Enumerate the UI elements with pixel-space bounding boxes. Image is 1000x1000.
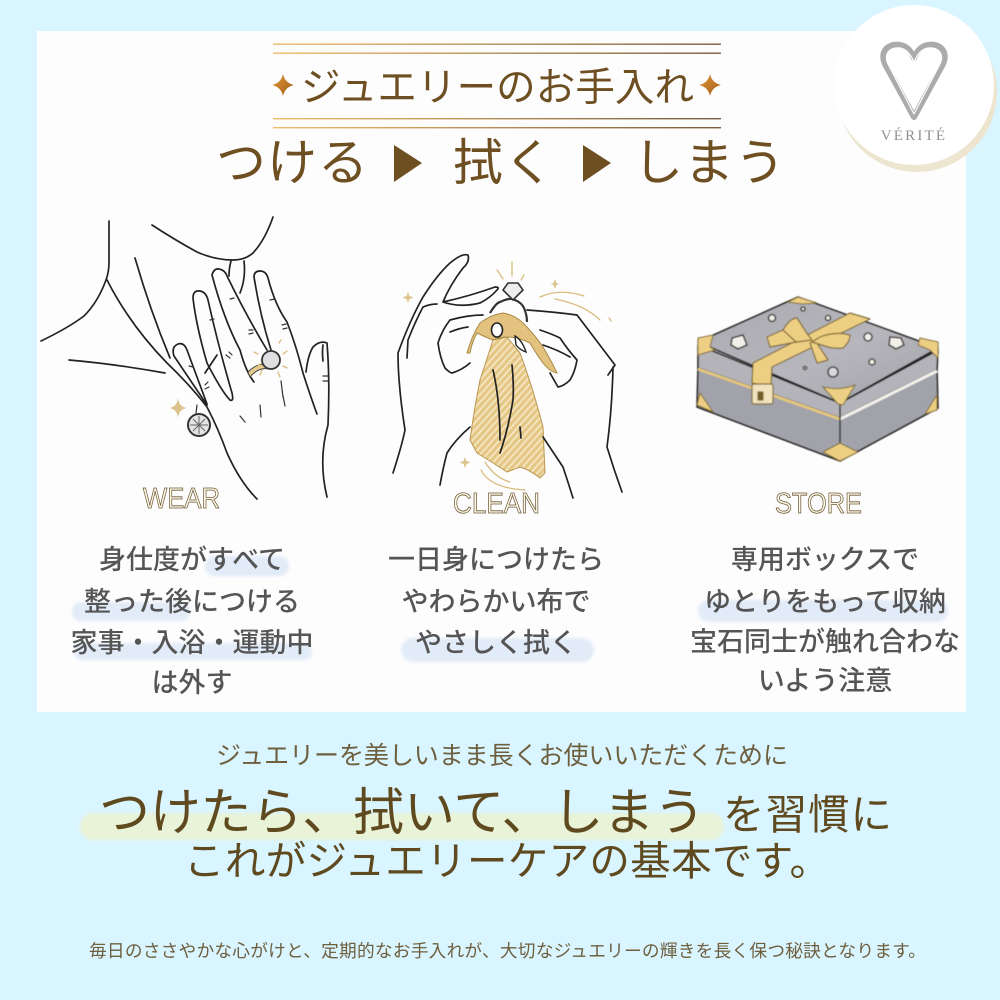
gold corners xyxy=(697,297,938,461)
text block: store: 宝石同士が触れ合わな xyxy=(690,627,960,657)
text block: store xyxy=(690,545,960,696)
label: STORE: STORE xyxy=(775,488,862,520)
closing message: つけたら、拭いて、しまう xyxy=(99,784,705,841)
text block: store: 専用ボックスで xyxy=(731,545,919,575)
text block: clean xyxy=(388,545,604,662)
illustration: hand on neck xyxy=(41,217,329,499)
heading: wear, clean, store xyxy=(216,135,785,191)
gold ribbon xyxy=(752,313,870,404)
cloth xyxy=(467,313,557,478)
text block: clean: やわらかい布で xyxy=(402,587,590,617)
heading: wear, clean, store: しまう xyxy=(633,135,785,191)
text block: store: ゆとりをもって収納 xyxy=(704,587,946,617)
closing message: を習慣に xyxy=(723,791,892,838)
text block: store: いよう注意 xyxy=(758,666,892,696)
text block: wear: 家事・入浴・運動中 xyxy=(70,628,314,658)
label: WEAR: WEAR xyxy=(143,483,220,515)
footnote: 毎日のささやかな心がけと、定期的なお手入れが、大切なジュエリーの輝きを長く保つ秘訣となります。 xyxy=(89,941,926,961)
panel: main white card xyxy=(37,31,966,712)
illustration: jewelry box xyxy=(697,297,938,461)
text block: wear: 整った後につける xyxy=(84,587,300,617)
text block: clean: やさしく拭く xyxy=(415,628,577,658)
logo badge xyxy=(834,5,997,172)
closing message: これがジュエリーケアの基本です。 xyxy=(184,838,830,884)
title block xyxy=(272,44,721,128)
text block: wear: は外す xyxy=(152,668,232,698)
logo badge: VÉRITÉ xyxy=(881,127,947,144)
label: CLEAN: CLEAN xyxy=(453,488,540,520)
heading: wear, clean, store: 拭く xyxy=(453,135,554,191)
text block: wear xyxy=(70,545,314,698)
text block: clean: 一日身につけたら xyxy=(388,545,604,575)
illustration: hands cleaning ring xyxy=(393,255,622,498)
lead text: ジュエリーを美しいまま長くお使いいただくために xyxy=(216,742,788,770)
closing message xyxy=(80,784,892,884)
heading: wear, clean, store: つける xyxy=(216,135,368,191)
gems xyxy=(731,307,904,377)
text block: wear: 身仕度がすべて xyxy=(99,545,285,575)
title block: ジュエリーのお手入れ xyxy=(301,66,694,110)
